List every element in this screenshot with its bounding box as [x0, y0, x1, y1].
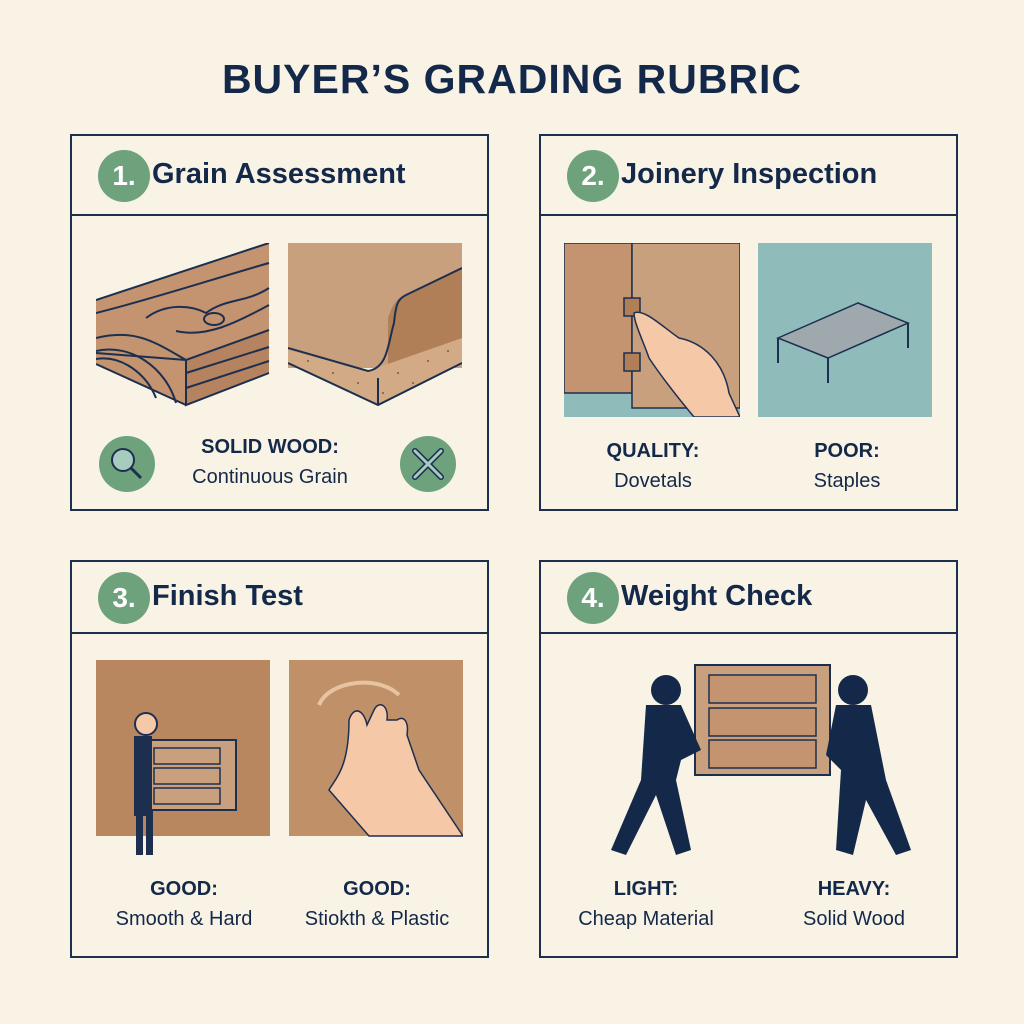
header 1: Grain Assessment — [152, 158, 406, 190]
text: good 1: GOOD: — [150, 878, 218, 900]
panel: grain assessment — [70, 134, 489, 511]
illustration: solid wood — [96, 243, 270, 406]
text: good 1 — [116, 878, 252, 930]
text: good 2: GOOD: — [343, 878, 411, 900]
header 4 — [541, 562, 956, 634]
text: heavy — [803, 878, 905, 930]
text: light — [578, 878, 714, 930]
title: BUYER’S GRADING RUBRIC — [222, 56, 802, 102]
illustration: hand on surface — [289, 660, 463, 837]
illustration: particle board — [288, 243, 462, 406]
text: good 2: Stiokth & Plastic — [305, 908, 449, 930]
header 2 — [541, 136, 956, 216]
text: heavy: Solid Wood — [803, 908, 905, 930]
text: light: Cheap Material — [578, 908, 714, 930]
illustration: staple — [758, 243, 932, 417]
header 3: 3. — [112, 582, 136, 613]
header 1: 1. — [112, 160, 136, 191]
text: light: LIGHT: — [614, 878, 678, 900]
icon: tools — [400, 436, 456, 492]
text: poor: Staples — [814, 470, 880, 492]
header 2: 2. — [581, 160, 605, 191]
text: poor: POOR: — [814, 440, 880, 462]
text: quality: Dovetals — [614, 470, 692, 492]
panel: joinery — [539, 134, 958, 511]
panel: finish test — [70, 560, 489, 958]
text: solid wood: Continuous Grain — [192, 466, 348, 488]
icon: magnifier — [99, 436, 155, 492]
text: solid wood: SOLID WOOD: — [201, 436, 339, 458]
illustration: two people carrying dresser — [611, 664, 911, 855]
text: solid wood — [192, 436, 348, 488]
text: heavy: HEAVY: — [818, 878, 890, 900]
header 3: Finish Test — [152, 580, 303, 612]
text: good 2 — [305, 878, 449, 930]
illustration: person with dresser — [96, 660, 270, 855]
text: quality: QUALITY: — [607, 440, 699, 462]
text: quality — [607, 440, 699, 492]
panel: weight check — [539, 560, 958, 958]
header 3 — [72, 562, 487, 634]
text: poor — [814, 440, 880, 492]
header 2: Joinery Inspection — [621, 158, 877, 190]
header 4: Weight Check — [621, 580, 812, 612]
text: good 1: Smooth & Hard — [116, 908, 252, 930]
header 4: 4. — [581, 582, 605, 613]
illustration: dovetail — [564, 243, 740, 417]
header 1 — [72, 136, 487, 216]
